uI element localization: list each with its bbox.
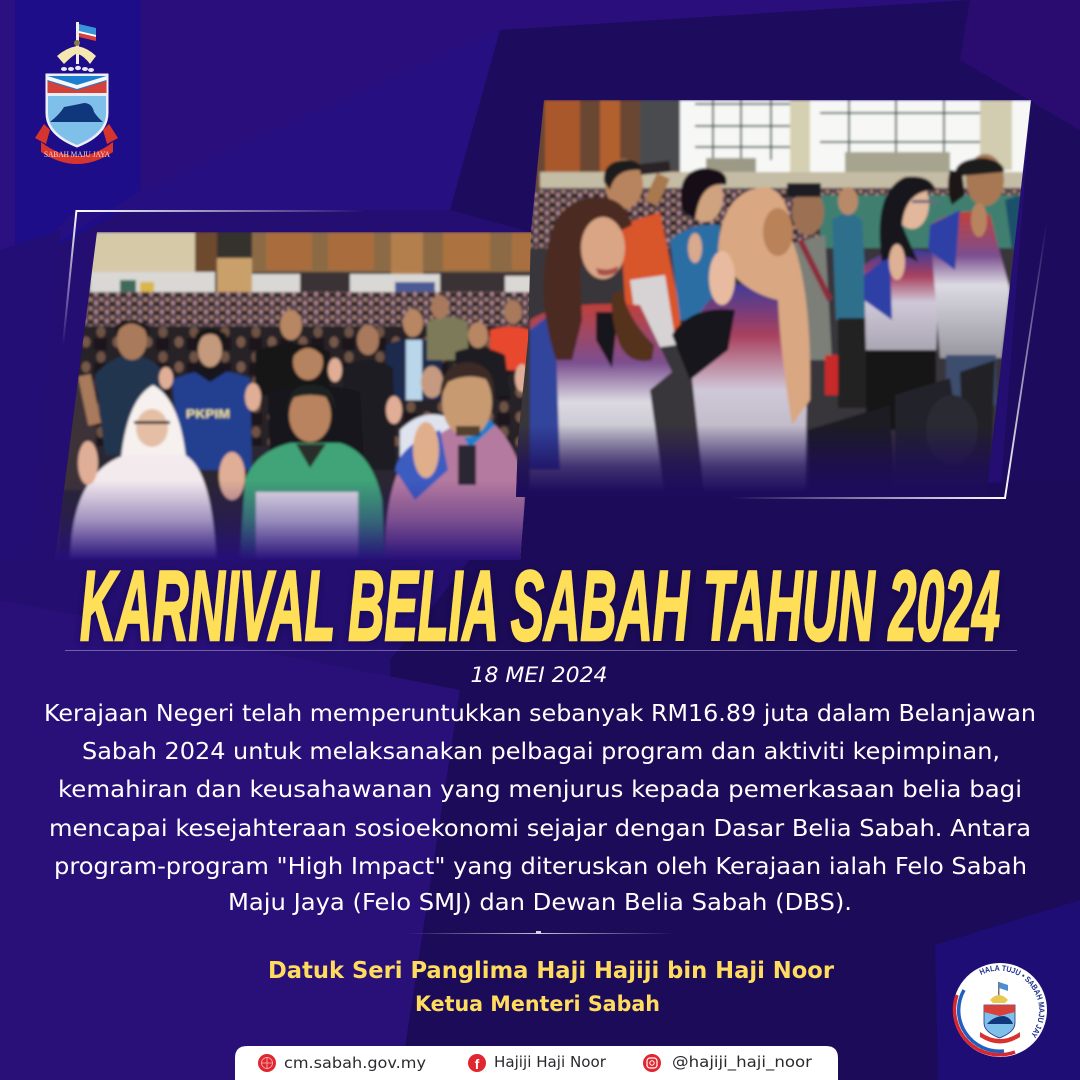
- contact bar: [235, 1046, 838, 1080]
- fade at bottom of left photo: [55, 484, 525, 560]
- body paragraph: Sabah 2024 untuk melaksanakan pelbagai program dan aktiviti kepimpinan,: [82, 737, 1000, 765]
- green shirt man: [240, 385, 385, 562]
- attribution name: Datuk Seri Panglima Haji Hajiji bin Haji Noor: [268, 958, 835, 984]
- black shirt man: [266, 384, 345, 450]
- body paragraph: Kerajaan Negeri telah memperuntukkan sebanyak RM16.89 juta dalam Belanjawan: [44, 699, 1036, 727]
- hijab woman: [672, 187, 810, 500]
- icon: facebook: [468, 1054, 486, 1072]
- right man in blue pink polo: [385, 362, 525, 560]
- raised hands in left photo: [78, 358, 529, 500]
- body paragraph: program-program "High Impact" yang diteruskan oleh Kerajaan ialah Felo Sabah: [54, 852, 1027, 880]
- website text: cm.sabah.gov.my: [284, 1054, 426, 1072]
- date: 18 MEI 2024: [470, 663, 608, 687]
- photo: crowd taking oath, left: [55, 232, 531, 560]
- photo: officials taking oath, right: [510, 100, 1040, 500]
- woman in blue dress: [832, 214, 868, 320]
- black bags: [808, 360, 996, 464]
- black jacket man: [343, 360, 396, 470]
- glasses woman: [864, 177, 940, 430]
- body paragraph: Maju Jaya (Felo SMJ) dan Dewan Belia Sabah (DBS).: [228, 888, 852, 916]
- crest logo: Sabah coat of arms: [35, 22, 118, 164]
- photo frame line: left: [62, 210, 366, 345]
- icon: instagram: [643, 1054, 661, 1072]
- body paragraph: kemahiran dan keusahawanan yang menjurus kepada pemerkasaan belia bagi: [58, 775, 1022, 803]
- facebook text: Hajiji Haji Noor: [494, 1053, 607, 1071]
- badge: Hala Tuju Sabah Maju Jaya: HALA TUJU • SABAH MAJU JAYA: [979, 965, 1044, 1038]
- divider under title: [65, 650, 1017, 651]
- crest logo: Sabah coat of arms: SABAH MAJU JAYA: [44, 150, 110, 159]
- scout man: [785, 183, 832, 360]
- blue PKPIM shirt man: PKPIM: [186, 407, 230, 421]
- fade at bottom of right photo: [516, 428, 992, 497]
- suit row: [255, 344, 330, 395]
- body paragraph: [44, 699, 1036, 916]
- woman behind right man: [398, 412, 452, 459]
- red carpet and black bag: [825, 355, 839, 395]
- blue PKPIM shirt man: [172, 329, 252, 470]
- body paragraph: mencapai kesejahteraan sosioekonomi sejajar dengan Dasar Belia Sabah. Antara: [49, 814, 1031, 842]
- instagram text: @hajiji_haji_noor: [672, 1053, 813, 1072]
- white hijab woman: [70, 385, 216, 560]
- man in orange shirt with phone: [604, 159, 682, 350]
- icon: facebook: f: [475, 1056, 480, 1072]
- woman in front, long hair: [530, 197, 672, 500]
- man with flat cap: [926, 152, 1020, 406]
- navy tee man: [62, 320, 165, 490]
- divider above attribution: [405, 931, 675, 934]
- older woman in blue: [670, 168, 727, 320]
- icon: website globe: [258, 1054, 276, 1072]
- photo frame line: right: [730, 222, 1048, 499]
- attribution role: Ketua Menteri Sabah: [415, 992, 660, 1016]
